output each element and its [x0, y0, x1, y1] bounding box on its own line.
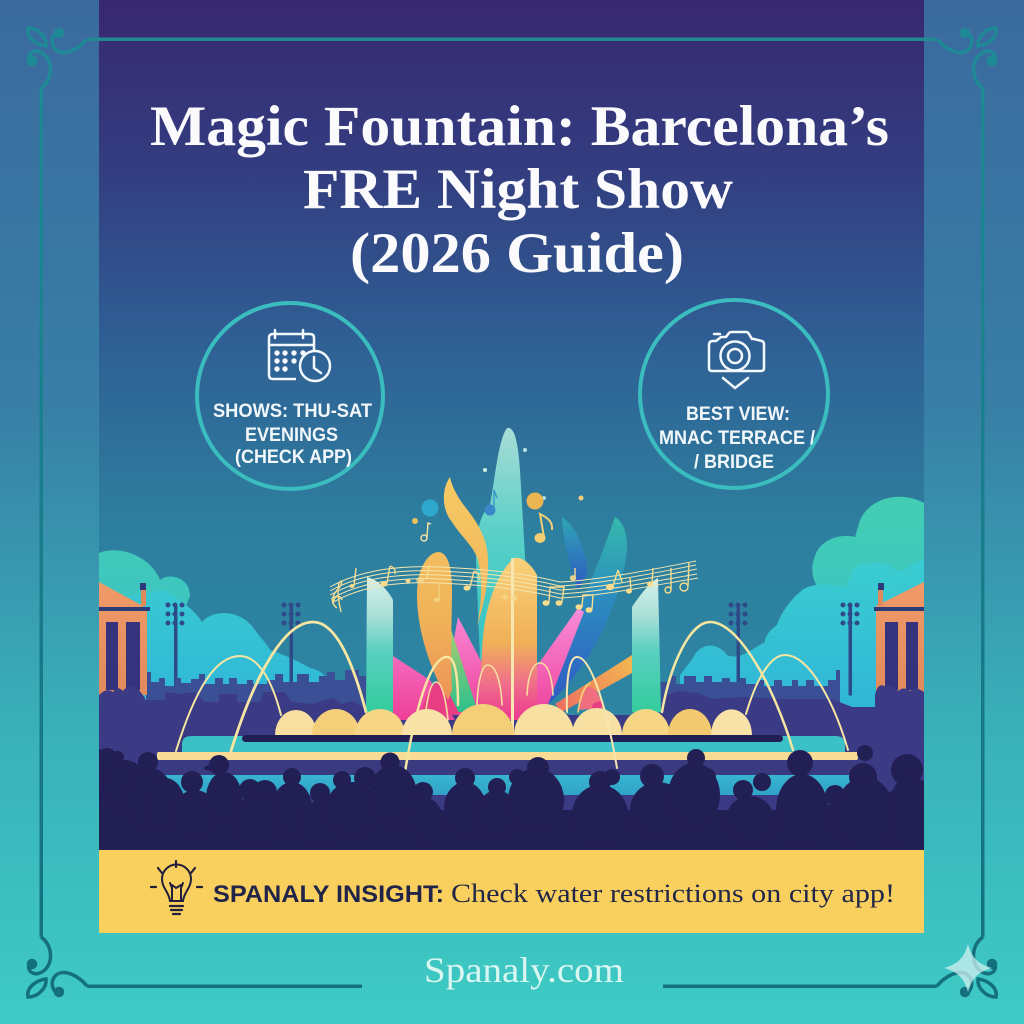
banner background: [99, 850, 924, 933]
insight message: Check water restrictions on city app!: [451, 879, 895, 908]
clouds left: [99, 550, 338, 700]
callout: best view: [640, 300, 828, 488]
icon: light bulb: [151, 861, 202, 914]
title line 1: Magic Fountain: Barcelona’s: [150, 95, 889, 158]
fountain: yellow leaf: [417, 552, 452, 700]
frame: corner top-left: [28, 28, 87, 88]
callout ring right: [640, 300, 828, 488]
panel: fountain scene: [93, 428, 932, 855]
banner: insight: [99, 850, 924, 933]
callout: shows: [197, 303, 383, 489]
title line 3: (2026 Guide): [350, 222, 684, 285]
basin: lower water: [165, 775, 855, 795]
title line 2: FRE Night Show: [303, 158, 733, 221]
music staff: [330, 561, 698, 603]
fountain: teal column right: [632, 578, 661, 712]
frame: top line: [88, 38, 936, 41]
distant crowd purple: [99, 691, 924, 815]
distant skyline right: [660, 670, 840, 714]
callout text right: BEST VIEW:: [686, 404, 790, 425]
distant skyline: [146, 670, 366, 708]
basin: dark ledge: [242, 735, 783, 742]
callout text left: [213, 401, 372, 468]
icon: camera: [709, 332, 764, 388]
fountain: yellow flame: [444, 477, 488, 627]
frame: bottom line right: [663, 984, 937, 988]
frame: left line: [40, 88, 43, 937]
temple right: [874, 582, 924, 695]
icon: calendar with clock: [269, 330, 330, 381]
fountain: blue note: [484, 490, 497, 516]
crowd silhouette: [93, 745, 932, 855]
floodlight poles: [166, 602, 860, 695]
fountain: blue jets behind: [548, 517, 628, 704]
temple left: [99, 582, 150, 695]
music notes on staff: [333, 562, 689, 613]
fountain: right pink and orange beams: [537, 609, 632, 712]
basin: purple wall: [165, 760, 855, 775]
footer: site name: Spanaly.com: [424, 950, 624, 990]
frame: bottom line left: [87, 984, 362, 988]
fountain: central yellow jet: [478, 558, 537, 720]
fountain: white centre spout: [511, 558, 514, 736]
callout text left: SHOWS: THU-SAT: [213, 401, 372, 422]
panel: night sky: [99, 0, 924, 850]
callout text left: EVENINGS: [245, 425, 338, 446]
frame: right line: [981, 88, 984, 937]
fountain domes: [275, 704, 752, 735]
title: [150, 95, 889, 285]
basin: cream rim: [157, 752, 858, 760]
clouds right: [680, 497, 924, 710]
icon: sparkle: [944, 944, 992, 992]
frame: corner bottom-left: [28, 937, 87, 997]
callout text right: MNAC TERRACE /: [659, 428, 816, 449]
fountain: teal column left: [366, 577, 393, 712]
basin: teal pool: [182, 736, 845, 752]
frame: corner bottom-right: [937, 937, 996, 997]
fountain: green and pink beams: [393, 617, 482, 720]
spectators by temples: [99, 685, 924, 707]
callout ring left: [197, 303, 383, 489]
fountain: central spire: [476, 428, 527, 660]
water arches: [176, 622, 848, 772]
callout text right: / BRIDGE: [694, 452, 774, 473]
callout text left: (CHECK APP): [235, 447, 352, 468]
floating notes and orbs: [412, 448, 584, 543]
insight label: SPANALY INSIGHT:: [213, 881, 444, 908]
callout text right: [659, 404, 816, 473]
frame: corner top-right: [937, 28, 996, 88]
